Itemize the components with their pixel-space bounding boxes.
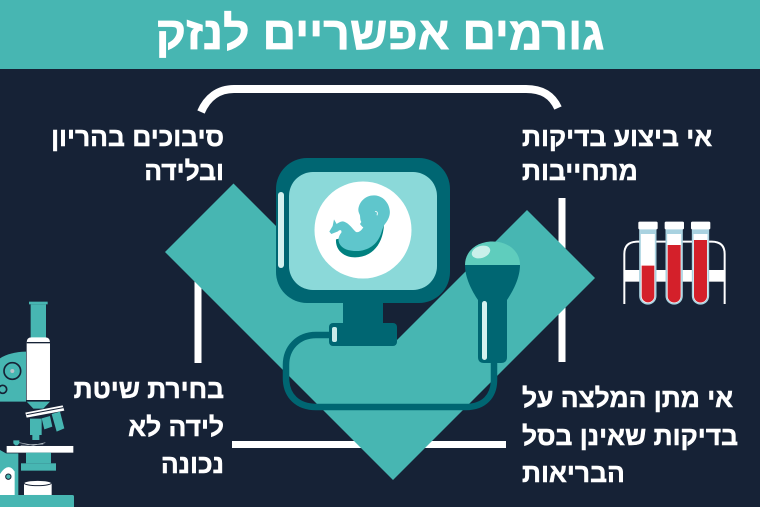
text: mandatory tests not performed: אי ביצוע בדיקות [522, 122, 712, 152]
text: mandatory tests not performed [522, 122, 712, 186]
text: mandatory tests not performed: מתחייבות [522, 156, 638, 186]
title: גורמים אפשריים לנזק [156, 7, 604, 59]
screen circle [314, 182, 412, 278]
white body [27, 337, 50, 400]
icon: microscope [0, 302, 74, 507]
base [0, 495, 74, 507]
text: no recommendation for uncovered tests: הבריאות [522, 458, 625, 488]
ultrasound probe [465, 242, 520, 363]
tube 3 [691, 222, 710, 304]
white frame [198, 89, 562, 444]
text: wrong delivery method [74, 374, 224, 479]
text: no recommendation for uncovered tests: אי מתן המלצה על [522, 383, 733, 413]
icon: fetus [329, 195, 390, 257]
monitor base [329, 323, 397, 346]
title banner [0, 0, 760, 69]
text: wrong delivery method: בחירת שיטת [74, 374, 224, 404]
objective lenses [30, 419, 42, 440]
text: pregnancy and birth complications: ובלידה [144, 156, 224, 186]
tube 2 [665, 222, 684, 304]
large check mark [165, 184, 595, 480]
text: pregnancy and birth complications [51, 122, 224, 186]
arm [0, 352, 26, 402]
light cylinder [24, 483, 52, 495]
icon: test tubes in rack [624, 222, 725, 304]
eyepiece tube [29, 302, 48, 304]
text: wrong delivery method: נכונה [161, 449, 224, 479]
monitor [276, 158, 450, 303]
base column [0, 450, 18, 495]
text: wrong delivery method: לידה לא [128, 412, 224, 442]
monitor stand [343, 300, 383, 328]
text: pregnancy and birth complications: סיבוכים בהריון [51, 122, 224, 152]
ultrasound machine [276, 158, 520, 407]
stage [7, 446, 73, 453]
rack [624, 242, 725, 304]
text: no recommendation for uncovered tests [522, 383, 738, 488]
nosepiece [25, 405, 64, 418]
cable [286, 335, 494, 407]
tube 1 [638, 222, 658, 304]
text: no recommendation for uncovered tests: בדיקות שאינן בסל [522, 420, 738, 450]
funnel [27, 402, 50, 409]
